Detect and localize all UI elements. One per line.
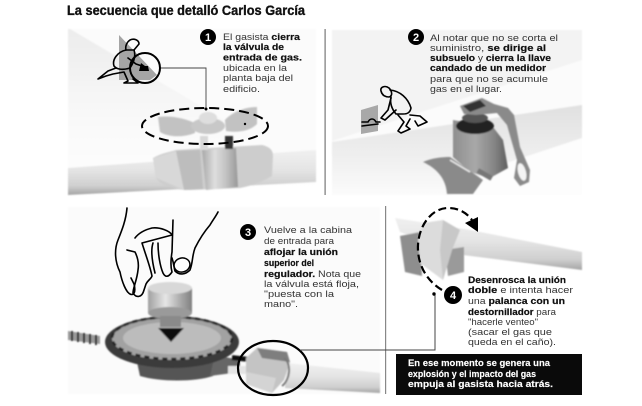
panel: step 4 [300,208,582,395]
leader line 4 [300,294,435,350]
text: step 3: Vuelve a la cabina [264,225,352,235]
text: step 1: entrada de gas. [223,52,302,62]
divider between panel 3 and 4 [385,206,386,394]
text: step 2: para que no se acumule [430,74,548,84]
text: step 3: mano". [264,299,298,309]
illustration: ball valve on pipe [68,107,316,195]
illustration: double union on pipe [395,218,582,280]
icon: worker crouching at meter [361,87,427,134]
text: step 1: El gasista cierra [223,32,301,42]
text: step 1: planta baja del [223,73,293,83]
text: step 3: superior del [264,258,314,268]
callout: explosion: En ese momento se genera una [408,358,551,368]
panel 2 background and pipe [332,30,582,195]
icon: hand on knob [116,208,218,296]
text: step 4: Desenrosca la unión [468,275,566,285]
panel: step 2 [332,29,582,195]
text: step 4: queda en el caño). [468,337,556,347]
step number 1 [200,29,216,45]
text: step 2: subsuelo y cierra la llave [430,53,551,63]
text: step 1 [223,32,302,94]
detail circle on nut [238,341,308,395]
text: step 1: ubicada en la [223,63,287,73]
text: step 1: la válvula de [223,42,284,52]
title: La secuencia que detalló Carlos García [67,2,305,18]
step number 3: 3 [245,227,251,239]
dashed rotation ellipse [142,108,268,144]
text: step 2: Al notar que no se corta el [430,33,558,43]
text: step 3 [264,225,361,309]
illustration: padlock gas valve [423,98,530,194]
step number 4: 4 [450,290,457,302]
panel 3 background [68,207,380,394]
text: step 4: destornillador para [468,307,556,317]
text: step 4: una palanca con un [468,296,565,306]
step number 2 [408,29,424,45]
step number 2: 2 [413,32,419,44]
dashed rotation arrow [418,208,478,290]
text: step 3: la válvula está floja, [264,279,359,289]
text: step 1: edificio. [223,84,260,94]
callout: explosion: explosión y el impacto del gas [408,369,536,379]
text: step 4: doble e intenta hacer [468,285,573,295]
callout: explosion [396,354,582,395]
panel: step 3 [68,207,380,395]
step number 4 [444,286,462,304]
text: step 4 [468,275,573,347]
text: step 2: suministro, se dirige al [430,43,546,53]
text: step 3: de entrada para [264,236,334,246]
leader line 1 [160,68,206,108]
text: step 4: "hacerle venteo" [468,317,538,327]
callout: explosion: empuja al gasista hacia atrás. [408,379,553,389]
step number 1: 1 [205,32,211,44]
text: step 3: regulador. Nota que [264,269,361,279]
divider between panel 1 and 2 [324,29,326,195]
text: step 3: "puesta con la [264,289,334,299]
text: step 2: gas en el lugar. [430,84,502,94]
icon: worker at entrance valve [98,35,160,83]
text: step 2: candado de un medidor [430,63,547,73]
text: step 2 [430,33,558,94]
step number 3 [240,224,256,240]
illustration: regulator [68,282,380,393]
text: step 4: (sacar el gas que [468,327,552,337]
text: step 3: aflojar la unión [264,247,338,257]
panel 1 background [68,29,316,195]
panel: step 1 [68,29,316,195]
